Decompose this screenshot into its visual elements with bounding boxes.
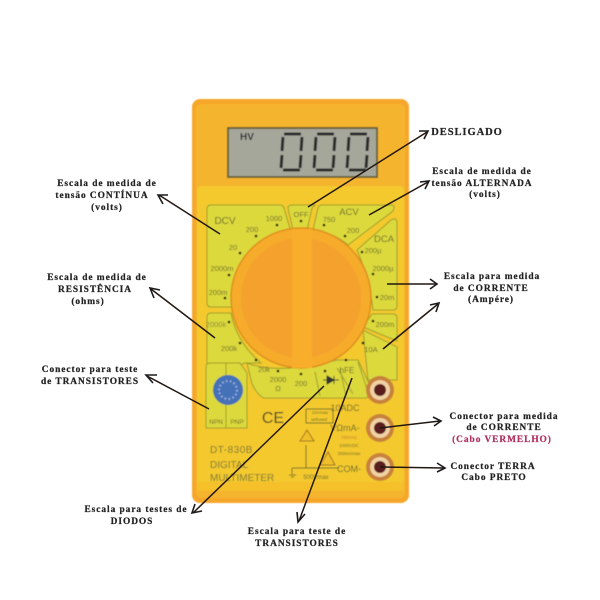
panel: DCA: 2000µ <box>372 264 394 273</box>
arrow: to DESLIGADO <box>308 131 428 207</box>
panel: 10A: 10A <box>364 345 378 354</box>
panel: DCA <box>357 219 397 341</box>
label: transistor connector: de TRANSISTORES <box>41 377 139 387</box>
arrow: to diode label <box>192 386 324 513</box>
panel: DCV scale: 200 <box>246 225 258 234</box>
label: current connector: (Cabo VERMELHO) <box>452 434 552 445</box>
warnings and jack labels: COM- <box>337 464 361 474</box>
label: DCV: (volts) <box>91 202 123 213</box>
arrow: 10A to current label <box>383 303 439 349</box>
jack: 10ADC <box>366 376 394 404</box>
label: transistor scale: Escala para teste de <box>248 527 346 537</box>
label: transistor connector: Conector para teste <box>42 365 138 375</box>
transistor socket: PNP <box>230 419 244 426</box>
panel: lower ohm, diode and hFE scales <box>247 359 374 398</box>
label: ACV: Escala de medida de <box>432 167 532 177</box>
model text: MULTIMETER <box>210 473 274 484</box>
panel: 10A <box>362 330 397 380</box>
panel: DCA: DCA <box>374 234 395 245</box>
panel: DCV scale: 20 <box>229 243 237 252</box>
panel: DCV scale <box>207 205 291 307</box>
arrow: to current label <box>387 279 437 289</box>
warnings and jack labels: 10ADC <box>330 403 360 413</box>
label: ACV: (volts) <box>469 189 501 200</box>
panel: ACV: ACV <box>339 207 359 218</box>
warnings and jack labels: 10Amax <box>312 410 329 415</box>
arrow: to ACV label <box>369 181 429 215</box>
label: diode scale: Escala para testes de <box>84 505 188 515</box>
label: current connector: Conector para medida <box>450 412 558 422</box>
icon: diode symbol <box>323 376 339 384</box>
CE mark: CE <box>262 410 284 427</box>
warnings and jack labels: 750VAC <box>341 435 358 440</box>
model text: DIGITAL <box>210 460 249 471</box>
panel: lower ohm, diode and hFE scales: 200 <box>295 379 307 388</box>
label: diode scale: DIODOS <box>111 517 153 527</box>
panel: DCV scale: 1000 <box>266 214 282 223</box>
label: resistance: Escala de medida de <box>47 273 147 283</box>
panel: lower ohm, diode and hFE scales: hFE <box>340 366 354 375</box>
transistor socket: NPN <box>209 419 223 426</box>
panel: ACV: 750 <box>323 215 335 224</box>
transistor socket <box>206 363 247 428</box>
digits 000 <box>281 134 368 170</box>
label: resistance: RESISTÊNCIA <box>58 283 132 295</box>
label: current scale: de CORRENTE <box>453 284 529 294</box>
panel: ohm scale: 2000k <box>206 320 226 329</box>
arrow: to transistor connector label <box>146 375 209 409</box>
label: ground connector: Conector TERRA <box>450 462 536 472</box>
label: current scale: Escala para medida <box>444 272 540 282</box>
label: current scale: (Ampére) <box>468 294 514 305</box>
panel: ohm scale: 200k <box>221 344 237 353</box>
panel: ohm scale <box>206 313 261 370</box>
panel: OFF: OFF <box>294 210 309 219</box>
jack: COM <box>366 453 394 481</box>
label: DCV: tensão CONTÍNUA <box>55 189 149 201</box>
warnings and jack labels: unfused <box>311 417 328 422</box>
warnings and jack labels: 200mAmax <box>338 451 361 456</box>
panel: OFF <box>288 205 315 230</box>
display indicator HV: HV <box>240 132 254 143</box>
warnings and jack labels: VΩmA- <box>330 423 360 433</box>
arrow: jack to current connector label <box>380 417 441 428</box>
panel: DCA: 200µ <box>365 246 382 255</box>
arrow: to DCV label <box>158 195 220 234</box>
panel: lower ohm, diode and hFE scales: 2000 <box>270 375 286 384</box>
label: resistance: (ohms) <box>71 296 105 307</box>
warnings and jack labels <box>289 403 361 481</box>
panel: DCV scale: 200m <box>209 288 227 297</box>
warnings and jack labels: 500Vmax <box>303 475 329 481</box>
label: current connector: de CORRENTE <box>466 423 542 433</box>
label: ground connector: Cabo PRETO <box>461 473 527 483</box>
arrow: jack to ground connector label <box>380 463 445 472</box>
arrow: to hFE label <box>297 378 352 522</box>
arrow: to resistance label <box>150 288 215 338</box>
label: ACV: tensão ALTERNADA <box>431 179 533 189</box>
warnings and jack labels: 1000VDC <box>339 443 360 448</box>
model text <box>210 445 274 484</box>
display <box>227 127 378 178</box>
panel: DCA: 20m <box>380 293 394 302</box>
model text: DT-830B <box>210 445 253 456</box>
panel: DCV scale: 2000m <box>211 264 233 273</box>
panel: ACV <box>313 205 394 245</box>
panel: ACV: 200 <box>347 226 359 235</box>
panel: DCA: 200m <box>376 320 394 329</box>
label: transistor scale: TRANSISTORES <box>255 539 339 549</box>
panel: lower ohm, diode and hFE scales: 20k <box>258 365 270 374</box>
panel: lower ohm, diode and hFE scales: Ω <box>275 384 281 393</box>
panel: DCV scale: DCV <box>214 216 236 227</box>
label: DESLIGADO: DESLIGADO <box>431 127 503 138</box>
label: DCV: Escala de medida de <box>57 179 157 189</box>
jack: VΩmA <box>366 414 394 442</box>
rotary dial <box>231 228 371 368</box>
multimeter body <box>192 99 409 503</box>
